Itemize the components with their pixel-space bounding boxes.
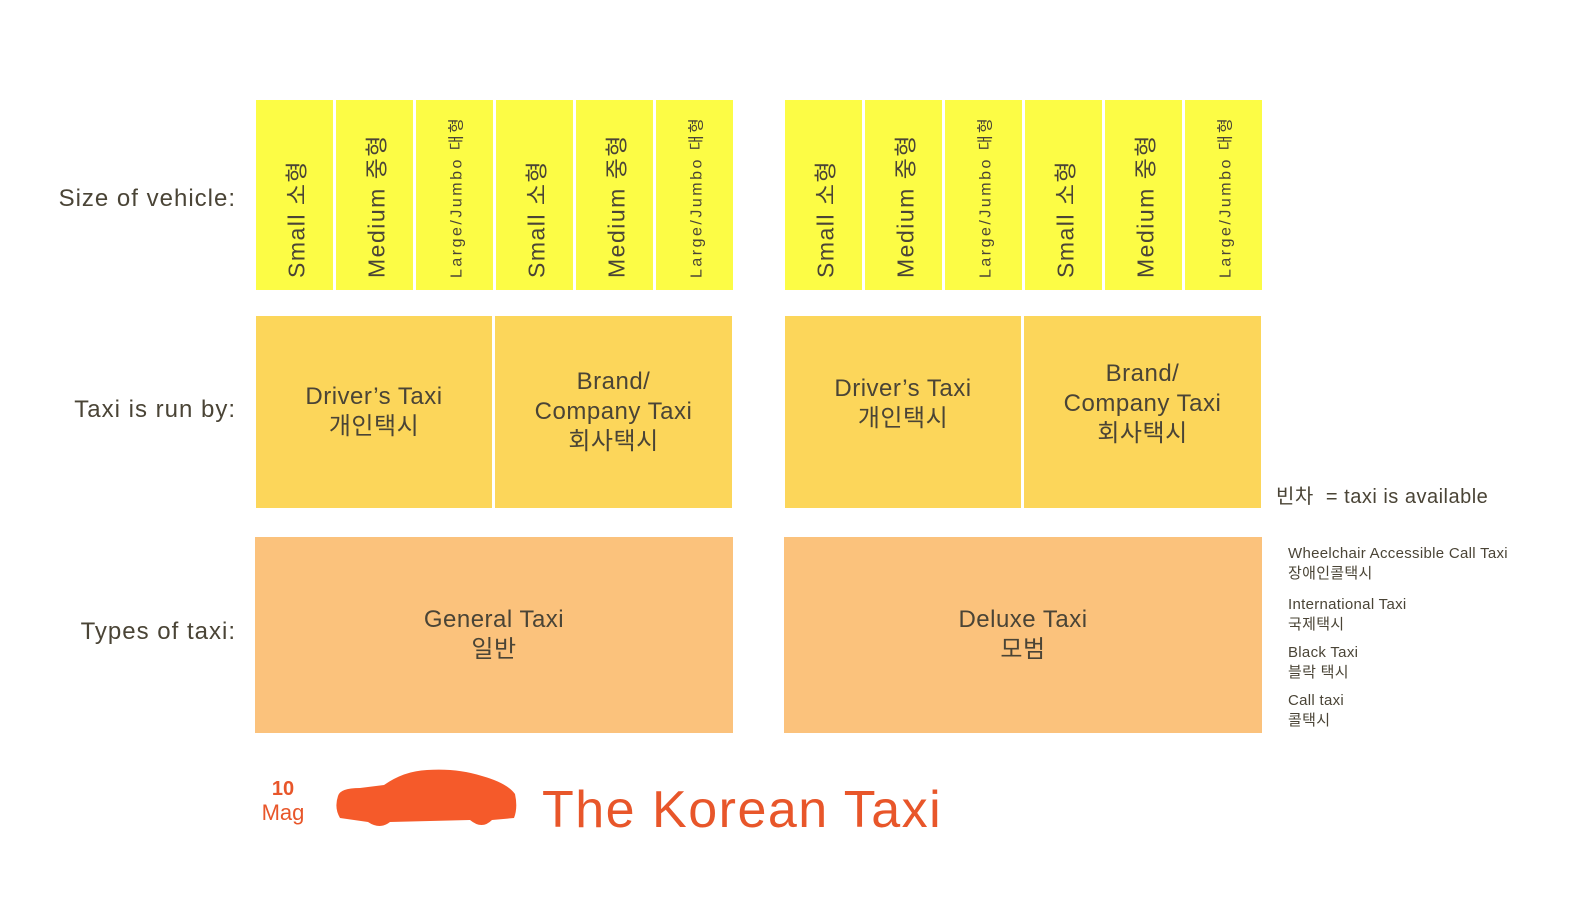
logo: 10 Mag: 10 [272, 778, 294, 800]
run by: company taxi right: 회사택시 [1097, 420, 1188, 447]
run by: driver's taxi right: Driver’s Taxi [834, 375, 972, 402]
run by: driver's taxi left [256, 316, 492, 508]
type: general taxi [255, 537, 733, 733]
run by: company taxi left: Company Taxi [535, 398, 692, 425]
other taxi types list: International Taxi [1288, 596, 1407, 613]
size cells right group: Small 소형 [812, 160, 838, 278]
size cells right group: Small 소형 [1052, 160, 1078, 278]
other taxi types list: Wheelchair Accessible Call Taxi [1288, 545, 1508, 562]
size cells right group: Medium 중형 [892, 134, 918, 278]
run by: company taxi left: 회사택시 [568, 428, 659, 455]
size cells right group: Large/Jumbo 대형 [1218, 116, 1234, 278]
other taxi types list: Call taxi [1288, 692, 1344, 709]
run by: driver's taxi left: Driver’s Taxi [305, 383, 443, 410]
run by: driver's taxi right [785, 316, 1021, 508]
other taxi types list: 블락 택시 [1288, 664, 1349, 681]
size cells right group: Medium 중형 [1132, 134, 1158, 278]
icon: car silhouette [336, 770, 516, 826]
type: general taxi: 일반 [471, 636, 517, 663]
size cells left group: Large/Jumbo 대형 [448, 116, 466, 278]
other taxi types list [1288, 545, 1508, 729]
note: available: 빈차 = taxi is available [1276, 486, 1488, 508]
other taxi types list: 콜택시 [1288, 712, 1330, 729]
run by: company taxi right: Brand/ [1106, 360, 1179, 387]
run by: driver's taxi left: 개인택시 [329, 413, 419, 440]
size cells left group: Medium 중형 [364, 134, 390, 278]
size cells left group: Small 소형 [524, 160, 550, 278]
size cells left group: Medium 중형 [604, 134, 630, 278]
type: general taxi: General Taxi [424, 606, 564, 633]
run by: driver's taxi right: 개인택시 [858, 405, 948, 432]
label: size of vehicle: Size of vehicle: [59, 185, 236, 212]
size cells right group: Large/Jumbo 대형 [978, 116, 994, 278]
logo: 10 Mag [262, 778, 304, 825]
type: deluxe taxi: Deluxe Taxi [958, 606, 1088, 633]
type: deluxe taxi [784, 537, 1262, 733]
type: deluxe taxi: 모범 [1000, 636, 1046, 663]
size cells right group [785, 100, 1262, 290]
other taxi types list: Black Taxi [1288, 644, 1358, 661]
other taxi types list: 장애인콜택시 [1288, 565, 1373, 582]
title: The Korean Taxi [542, 781, 942, 839]
size cells left group [256, 100, 733, 290]
other taxi types list: 국제택시 [1288, 616, 1344, 633]
size cells left group: Small 소형 [284, 160, 310, 278]
label: taxi is run by: Taxi is run by: [74, 396, 236, 423]
run by: company taxi right [1024, 316, 1261, 508]
logo: 10 Mag: Mag [262, 800, 304, 825]
size cells left group: Large/Jumbo 대형 [688, 116, 706, 278]
run by: company taxi left: Brand/ [577, 368, 650, 395]
run by: company taxi right: Company Taxi [1064, 390, 1221, 417]
label: types of taxi: Types of taxi: [81, 618, 236, 645]
run by: company taxi left [495, 316, 732, 508]
